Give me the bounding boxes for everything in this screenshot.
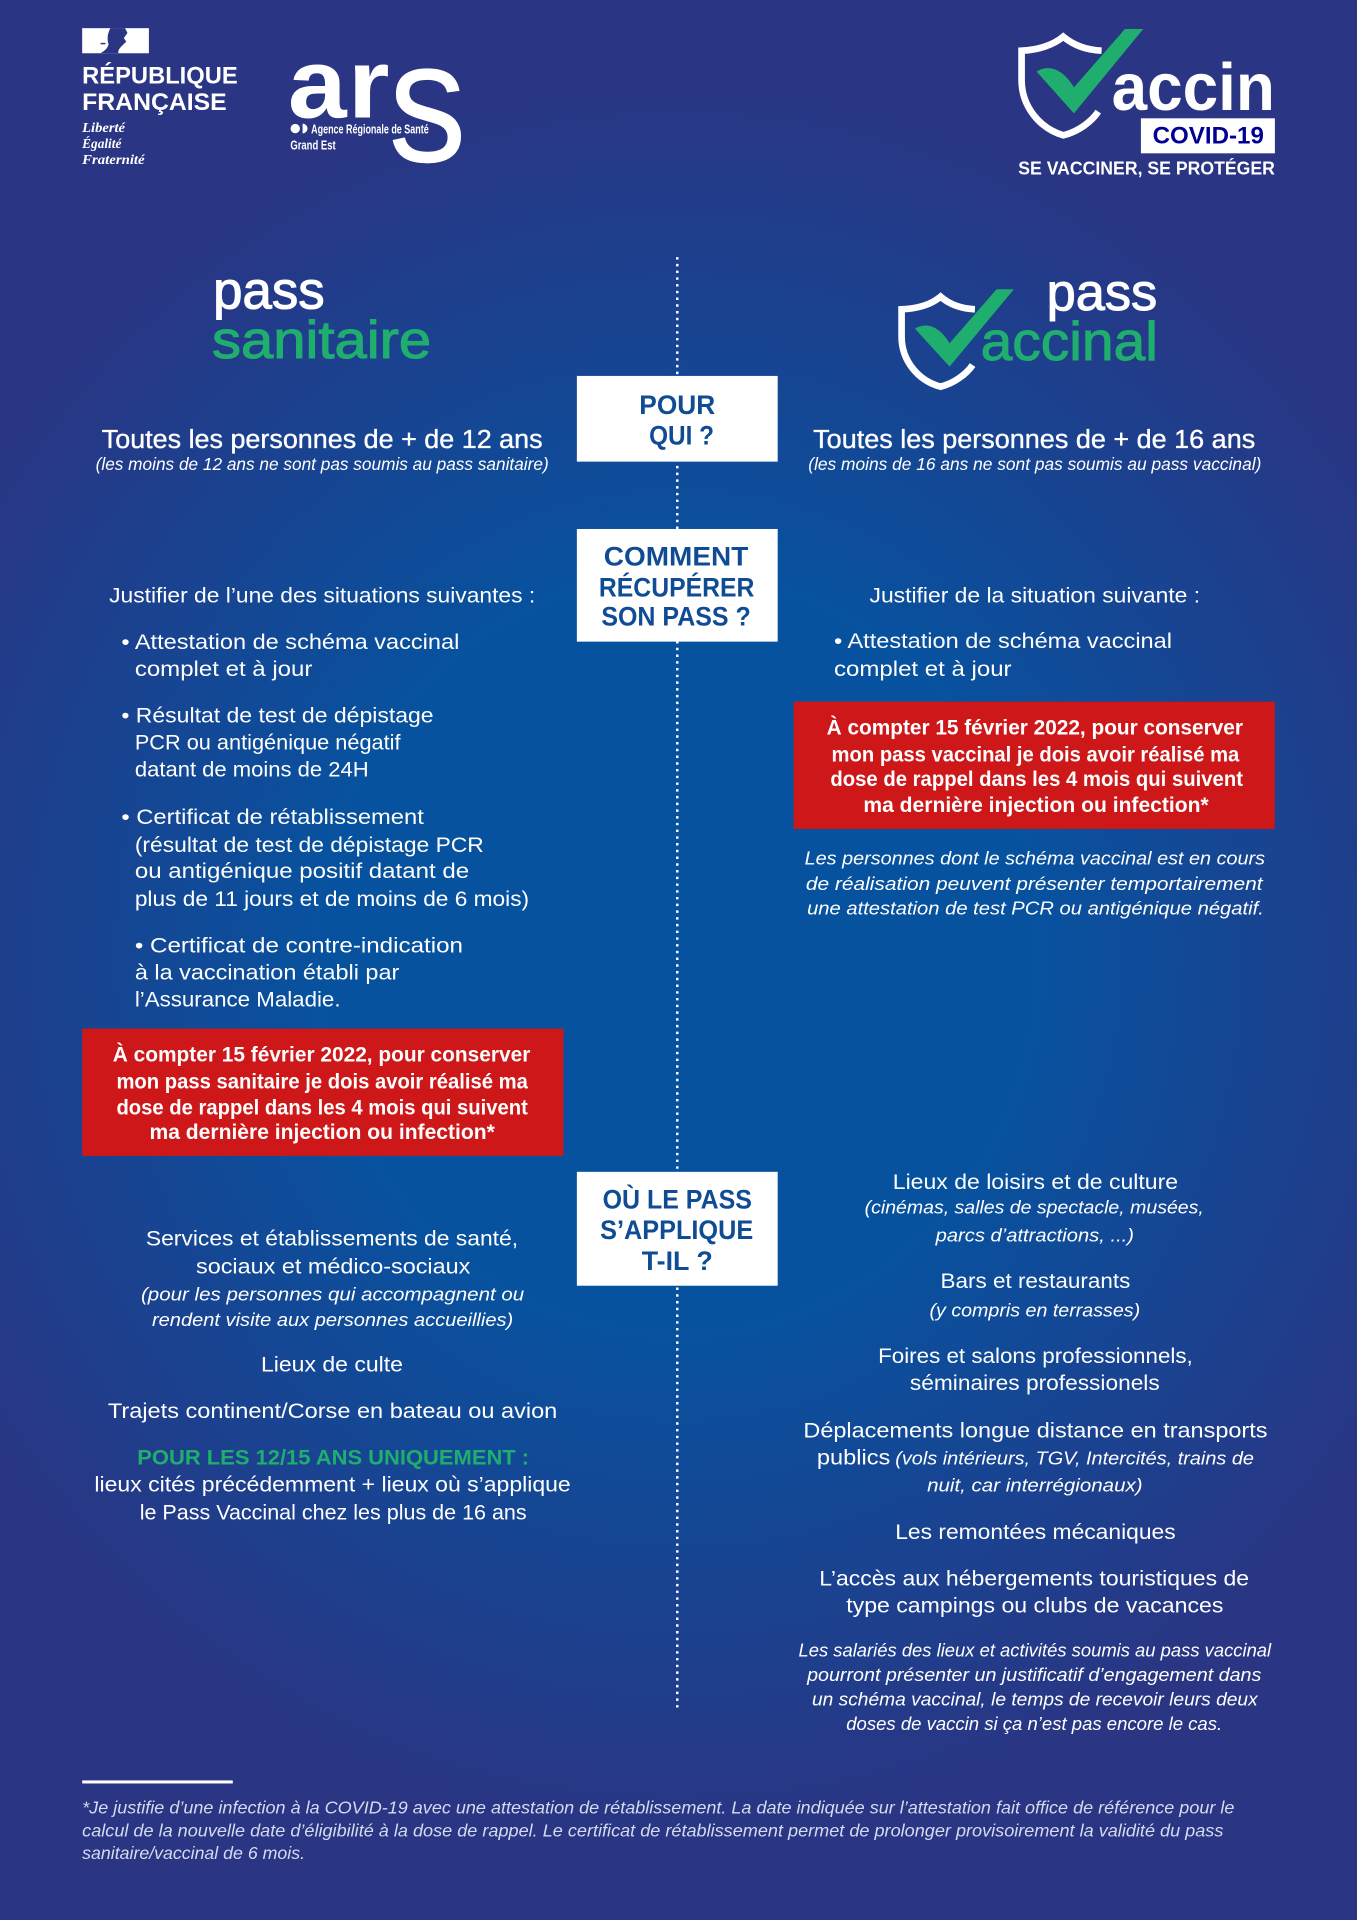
text: République Française: FRANÇAISE xyxy=(82,89,227,116)
text: justificatif pass vaccinal xyxy=(834,583,1200,681)
callout: rappel pass sanitaire: ma dernière injection ou infection* xyxy=(150,1121,496,1144)
text: lieux pass vaccinal: parcs d’attractions, ...) xyxy=(935,1225,1134,1246)
callout: rappel pass vaccinal: dose de rappel dans les 4 mois qui suivent xyxy=(830,768,1243,791)
text: lieux pass vaccinal: Foires et salons professionnels, xyxy=(878,1344,1193,1368)
label box: comment récupérer son pass xyxy=(577,529,778,642)
logo: pass sanitaire: sanitaire xyxy=(212,311,431,370)
icon: shield outline xyxy=(902,297,975,387)
text: lieux pass sanitaire: sociaux et médico-sociaux xyxy=(196,1254,471,1278)
text: justificatifs pass sanitaire: ou antigénique positif datant de xyxy=(135,859,469,883)
text: pour qui, pass sanitaire xyxy=(96,426,549,474)
text: justificatif pass vaccinal: Justifier de la situation suivante : xyxy=(870,583,1200,607)
text: pour qui, pass vaccinal: Toutes les personnes de + de 16 ans xyxy=(813,426,1255,454)
text: lieux pass vaccinal: L’accès aux hébergements touristiques de xyxy=(819,1567,1249,1591)
COVID-19 tag: COVID-19 xyxy=(1153,122,1264,149)
callout: rappel pass sanitaire: À compter 15 février 2022, pour conserver xyxy=(113,1044,530,1067)
label box: où le pass s'applique: OÙ LE PASS xyxy=(603,1184,752,1215)
callout: rappel pass vaccinal: ma dernière injection ou infection* xyxy=(863,794,1210,817)
text: lieux pass vaccinal: (y compris en terrasses) xyxy=(930,1299,1140,1320)
text: lieux pass vaccinal: Bars et restaurants xyxy=(941,1269,1130,1293)
text: devise xyxy=(81,120,145,168)
text: 12/15 ans: lieux cités précédemment + lieux où s’applique xyxy=(94,1472,571,1496)
icon: green check xyxy=(915,289,1014,367)
note: schéma en cours: une attestation de test PCR ou antigénique négatif. xyxy=(807,898,1264,919)
callout: rappel pass vaccinal: mon pass vaccinal je dois avoir réalisé ma xyxy=(832,744,1240,767)
note: schéma en cours: Les personnes dont le schéma vaccinal est en cours xyxy=(805,847,1265,868)
text: justificatifs pass sanitaire: • Résultat de test de dépistage xyxy=(121,703,434,727)
label box: comment récupérer son pass: COMMENT xyxy=(604,542,749,572)
text: lieux pass sanitaire: rendent visite aux personnes accueillies) xyxy=(152,1309,513,1330)
text: lieux pass vaccinal: (cinémas, salles de spectacle, musées, xyxy=(865,1196,1204,1217)
callout: rappel pass sanitaire xyxy=(82,1029,563,1156)
text: 12/15 ans xyxy=(94,1446,571,1525)
text: devise: Fraternité xyxy=(81,152,145,168)
callout: rappel pass vaccinal: À compter 15 février 2022, pour conserver xyxy=(827,717,1243,740)
text: lieux pass vaccinal: nuit, car interrégionaux) xyxy=(927,1474,1143,1495)
text: lieux pass sanitaire xyxy=(108,1226,557,1423)
text: ars xyxy=(288,5,467,199)
footnote: sanitaire/vaccinal de 6 mois. xyxy=(82,1843,305,1863)
text: 12/15 ans: le Pass Vaccinal chez les plus de 16 ans xyxy=(140,1501,527,1525)
icon: green check xyxy=(1037,29,1143,113)
text: justificatifs pass sanitaire: l’Assurance Maladie. xyxy=(135,988,341,1012)
text: justificatifs pass sanitaire: plus de 11 jours et de moins de 6 mois) xyxy=(135,887,529,911)
label box: comment récupérer son pass: SON PASS ? xyxy=(601,602,751,632)
text: justificatif pass vaccinal: • Attestation de schéma vaccinal xyxy=(834,629,1172,653)
footnote: calcul de la nouvelle date d’éligibilité à la dose de rappel. Le certificat de rétablissement permet de prolonger provisoirement la validité du pass xyxy=(82,1821,1224,1841)
text: justificatifs pass sanitaire: • Certificat de contre-indication xyxy=(135,934,463,958)
label box: pour qui xyxy=(577,376,778,462)
logo: pass sanitaire xyxy=(212,262,431,370)
text: accinal: accinal xyxy=(981,310,1158,372)
text: République Française xyxy=(82,61,238,116)
text: accin: accin xyxy=(1112,51,1275,125)
text: pour qui, pass sanitaire: Toutes les personnes de + de 12 ans xyxy=(102,426,543,454)
divider: dotted line xyxy=(676,257,678,1709)
text: lieux pass vaccinal: Les remontées mécaniques xyxy=(895,1520,1176,1544)
text: lieux pass sanitaire: Services et établissements de santé, xyxy=(146,1226,518,1250)
note: schéma en cours xyxy=(805,847,1265,919)
text: justificatifs pass sanitaire: à la vaccination établi par xyxy=(135,961,399,985)
note: salariés: Les salariés des lieux et activités soumis au pass vaccinal xyxy=(798,1640,1272,1661)
text: Agence Régionale de Santé: Grand Est xyxy=(290,137,336,152)
text: ars: r xyxy=(348,29,390,139)
callout: rappel pass sanitaire: mon pass sanitaire je dois avoir réalisé ma xyxy=(116,1071,528,1094)
text: devise: Liberté xyxy=(81,120,126,136)
text: lieux pass vaccinal: (vols intérieurs, TGV, Intercités, trains de xyxy=(895,1447,1254,1468)
text: justificatifs pass sanitaire: Justifier de l’une des situations suivantes : xyxy=(109,583,535,607)
logo: pass vaccinal xyxy=(902,263,1158,387)
text: lieux pass vaccinal: Déplacements longue distance en transports xyxy=(803,1419,1267,1443)
footnote xyxy=(82,1780,1234,1863)
text: lieux pass vaccinal: type campings ou clubs de vacances xyxy=(846,1594,1223,1618)
label box: où le pass s'applique xyxy=(577,1172,778,1286)
text: ars: a xyxy=(288,29,348,139)
text: pour qui, pass vaccinal xyxy=(808,426,1261,474)
text: justificatifs pass sanitaire: complet et à jour xyxy=(135,657,312,681)
label box: où le pass s'applique: S’APPLIQUE xyxy=(600,1215,753,1245)
text: lieux pass vaccinal: publics xyxy=(817,1445,890,1469)
logo: pass sanitaire: pass xyxy=(213,262,325,321)
text: lieux pass vaccinal: Lieux de loisirs et de culture xyxy=(893,1170,1178,1194)
text: slogan: SE VACCINER, SE PROTÉGER xyxy=(1018,157,1275,178)
text: Agence Régionale de Santé: Agence Régionale de Santé xyxy=(311,121,429,136)
note: salariés: doses de vaccin si ça n’est pas encore le cas. xyxy=(846,1713,1222,1734)
logo: République Française xyxy=(81,28,238,168)
text: ars: s xyxy=(388,5,467,199)
footnote: *Je justifie d’une infection à la COVID-19 avec une attestation de rétablissement. La date indiquée sur l’attestation fait office de référence pour le xyxy=(82,1797,1234,1817)
icon: shield outline xyxy=(1022,37,1102,135)
text: justificatifs pass sanitaire: (résultat de test de dépistage PCR xyxy=(135,833,484,857)
text: lieux pass sanitaire: (pour les personnes qui accompagnent ou xyxy=(141,1283,524,1304)
text: devise: Égalité xyxy=(81,135,122,152)
label box: pour qui: QUI ? xyxy=(649,420,714,450)
logo: ARS Grand Est xyxy=(288,5,467,199)
text: justificatif pass vaccinal: complet et à jour xyxy=(834,657,1012,681)
callout: rappel pass sanitaire: dose de rappel dans les 4 mois qui suivent xyxy=(116,1096,528,1119)
note: salariés xyxy=(798,1640,1272,1734)
text: pass: pass xyxy=(1047,263,1157,321)
text: Agence Régionale de Santé xyxy=(290,121,429,152)
text: lieux pass sanitaire: Lieux de culte xyxy=(261,1352,403,1376)
COVID-19 tag xyxy=(1141,118,1275,153)
text: lieux pass vaccinal: séminaires professionels xyxy=(910,1371,1160,1395)
text: justificatifs pass sanitaire xyxy=(109,583,535,1012)
text: République Française: RÉPUBLIQUE xyxy=(82,61,238,89)
text: pour qui, pass sanitaire: (les moins de 12 ans ne sont pas soumis au pass sanitaire) xyxy=(96,454,549,474)
label box: comment récupérer son pass: RÉCUPÉRER xyxy=(599,571,754,602)
text: 12/15 ans: POUR LES 12/15 ANS UNIQUEMENT : xyxy=(137,1446,529,1469)
label box: pour qui: POUR xyxy=(639,390,715,420)
logo: Vaccin COVID-19 xyxy=(1018,29,1275,178)
text: justificatifs pass sanitaire: PCR ou antigénique négatif xyxy=(135,730,401,754)
icon: ars dots xyxy=(291,124,307,133)
icon: Marianne block xyxy=(82,28,149,53)
text: justificatifs pass sanitaire: • Certificat de rétablissement xyxy=(121,805,424,829)
label box: où le pass s'applique: T-IL ? xyxy=(642,1246,713,1276)
text: pour qui, pass vaccinal: (les moins de 16 ans ne sont pas soumis au pass vaccinal) xyxy=(808,454,1261,474)
note: salariés: un schéma vaccinal, le temps de recevoir leurs deux xyxy=(812,1689,1259,1710)
text: lieux pass sanitaire: Trajets continent/Corse en bateau ou avion xyxy=(108,1399,557,1423)
text: justificatifs pass sanitaire: datant de moins de 24H xyxy=(135,757,369,781)
text: justificatifs pass sanitaire: • Attestation de schéma vaccinal xyxy=(121,630,459,654)
note: schéma en cours: de réalisation peuvent présenter temportairement xyxy=(806,873,1264,894)
note: salariés: pourront présenter un justificatif d’engagement dans xyxy=(806,1664,1261,1685)
text: lieux pass vaccinal xyxy=(803,1170,1267,1618)
callout: rappel pass vaccinal xyxy=(794,702,1275,829)
